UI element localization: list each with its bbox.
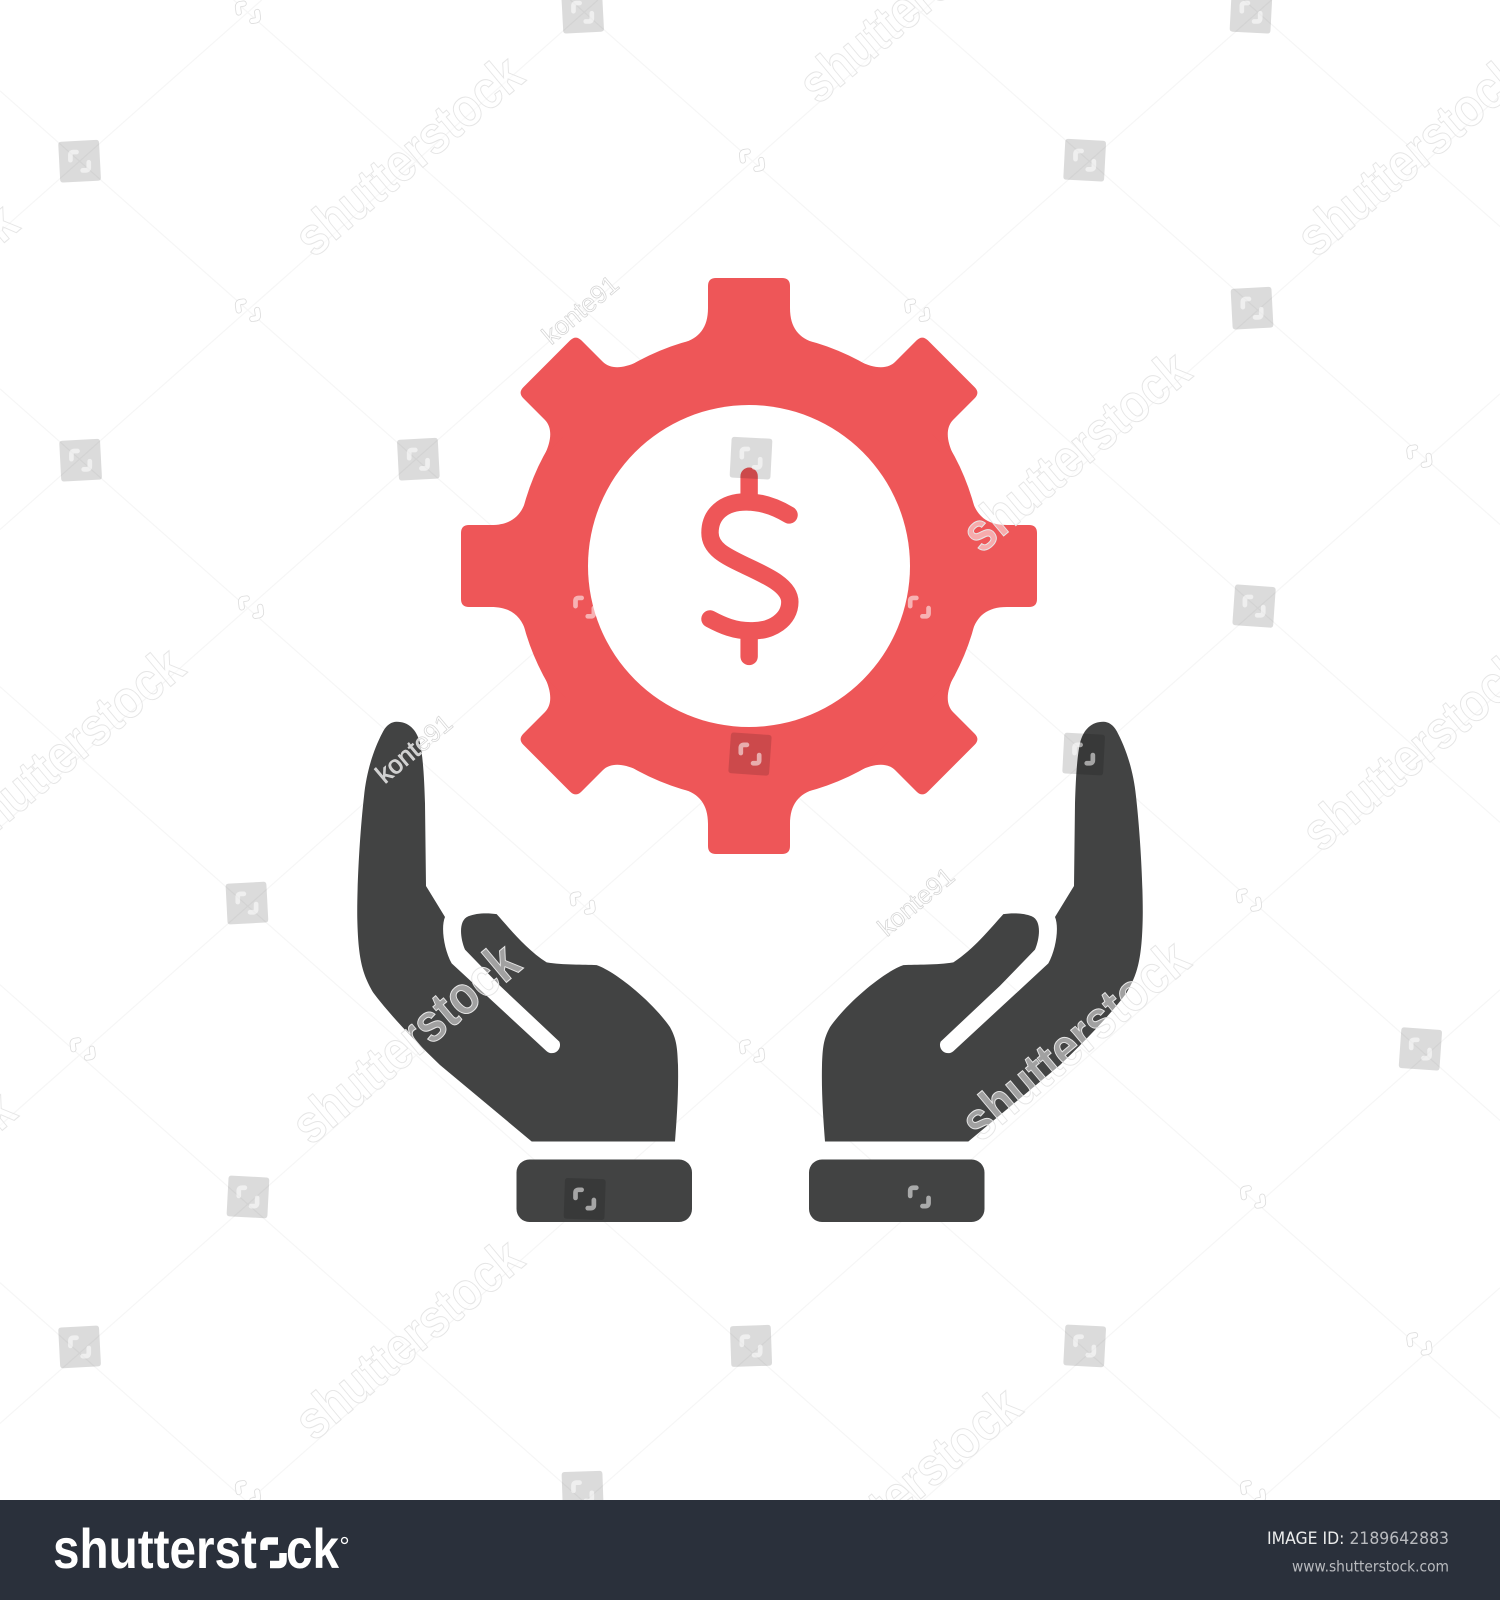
watermark contributor text: konte91 [873, 862, 960, 942]
watermark contributor text: konte91 [537, 270, 624, 350]
gear body and teeth [461, 278, 1037, 854]
website url: www.shutterstock.com [1292, 1558, 1449, 1576]
watermark shutterstock text: shutterstock [949, 928, 1201, 1152]
icon: left cuff [516, 1160, 692, 1222]
watermark shutterstock text: shutterstock [781, 1375, 1033, 1599]
footer band [0, 1500, 1500, 1600]
icon: right cuff [809, 1160, 984, 1222]
watermark shutterstock text: shutterstock [283, 43, 535, 268]
watermark contributor text [371, 270, 960, 942]
shutterstock logo: shutterstock [53, 1517, 340, 1580]
watermark contributor text: konte91 [371, 709, 458, 789]
watermark shutterstock text: shutterstock [280, 931, 532, 1156]
watermark shutterstock text: shutterstock [951, 339, 1202, 564]
icon: dollar sign [710, 476, 790, 656]
icon: right hand [822, 722, 1143, 1141]
icon: red gear with dollar sign [461, 278, 1037, 854]
watermark shutterstock text: shutterstock [283, 1227, 535, 1451]
icon: left hand [357, 722, 678, 1141]
image id: IMAGE ID: 2189642883 [1267, 1529, 1449, 1549]
